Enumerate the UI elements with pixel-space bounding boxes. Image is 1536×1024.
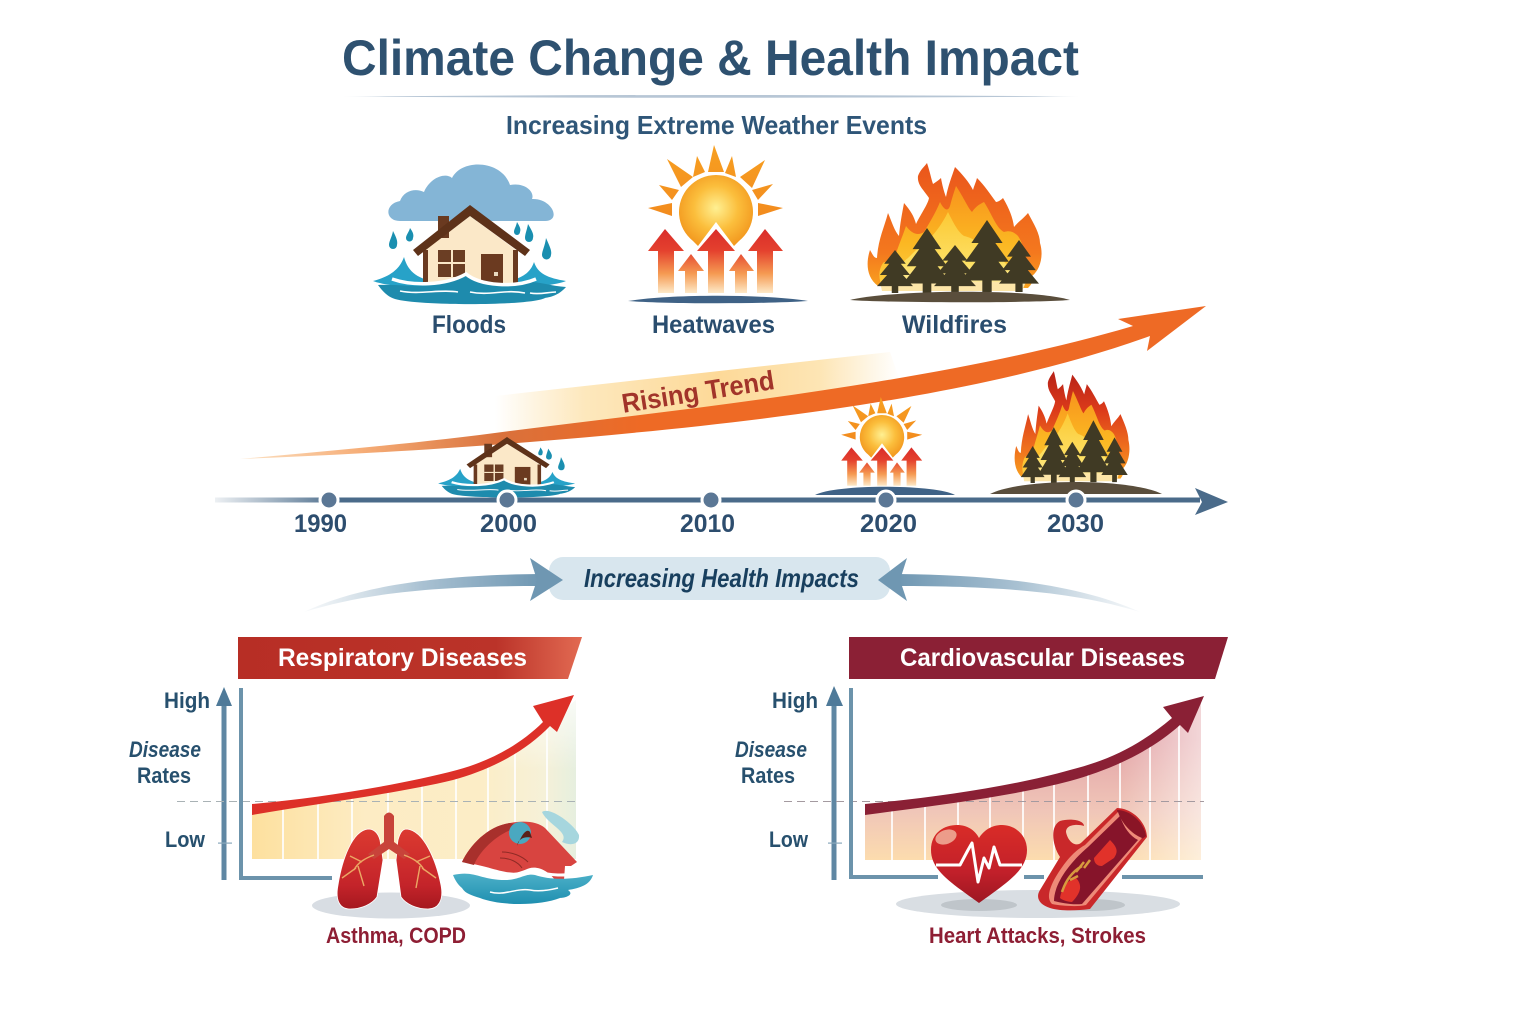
title: Climate Change & Health Impact [342,30,1079,86]
rising trend arrow [240,306,1206,459]
label: Heart Attacks, Strokes: Heart Attacks, Strokes [929,923,1146,948]
chart labels: Rates [741,763,795,788]
timeline years [294,510,1104,538]
banner: cardiovascular: Cardiovascular Diseases [900,644,1185,672]
chart labels [735,688,818,852]
axis frame [851,688,1203,877]
banner: cardiovascular [849,637,1228,679]
banner: respiratory: Respiratory Diseases [278,644,527,672]
axis frame [241,688,332,878]
trend arrow: respiratory [252,695,574,815]
icon: sunken house in flood water [453,811,593,904]
subtitle: extreme weather events: Increasing Extreme Weather Events [506,110,927,140]
timeline years: 2010 [680,510,735,538]
chart labels: Low [165,827,206,852]
icon: wildfire [850,163,1070,302]
timeline years: 1990 [294,510,347,538]
y axis arrow [216,687,232,880]
banner: respiratory [238,637,582,679]
area bars [865,695,1201,861]
timeline years: 2030 [1047,510,1104,538]
small icon: flood 2000 [438,437,575,498]
timeline markers [320,491,1085,509]
timeline years: 2000 [480,510,537,538]
trend arrow: cardiovascular [865,696,1204,815]
arrow: right to pill [878,558,1140,612]
area bars [252,695,576,860]
y axis arrow [826,686,843,880]
chart labels: Rates [137,763,191,788]
small icon: wildfire 2030 [990,371,1162,494]
icon: heart and artery [896,808,1180,918]
label: Heatwaves: Heatwaves [652,311,775,339]
label: Wildfires: Wildfires [902,311,1007,339]
timeline years: 2020 [860,510,917,538]
chart labels: Disease [735,737,807,762]
icon: lungs [312,812,470,918]
pill: increasing health impacts: Increasing Health Impacts [584,563,859,593]
small icon: heatwave 2020 [815,397,955,495]
label: Floods: Floods [432,311,506,339]
chart labels: Low [769,827,809,852]
icon: flood [373,164,566,304]
label: Asthma, COPD: Asthma, COPD [326,923,466,948]
label: Rising Trend: Rising Trend [620,365,776,419]
baseline dashed line [784,800,1204,802]
chart labels: Disease [129,737,201,762]
icon: artery [1038,808,1147,910]
chart labels: High [772,688,818,713]
rising trend band [495,352,900,436]
baseline dashed line [177,800,577,802]
arrow: left to pill [304,558,563,612]
pill: increasing health impacts [549,557,890,600]
title underline [342,95,1080,98]
panel: cardiovascular diseases [735,637,1228,948]
chart labels: High [164,688,210,713]
timeline axis [215,488,1228,515]
panel: respiratory diseases [129,637,593,948]
chart labels [129,688,210,852]
icon: heatwave [628,145,808,303]
icon: heart [931,825,1027,903]
